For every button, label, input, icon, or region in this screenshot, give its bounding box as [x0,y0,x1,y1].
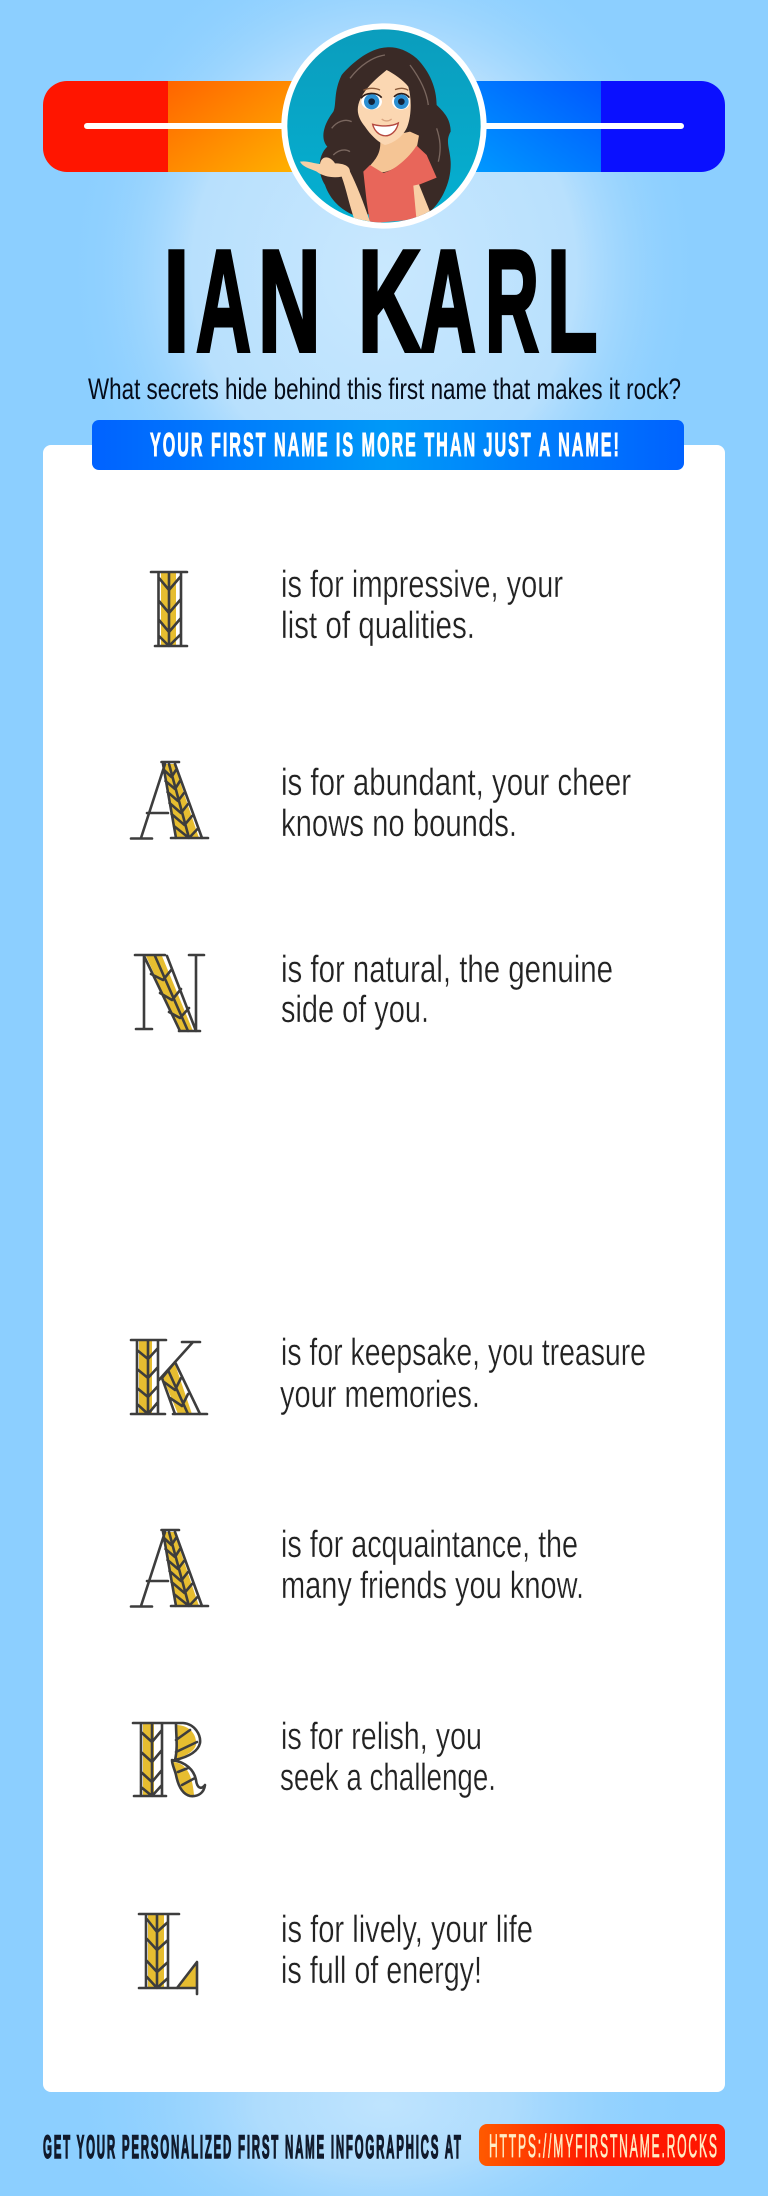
footer link button: HTTPS://MYFIRSTNAME.ROCKS [489,2129,717,2165]
icon: letter K [131,1340,207,1414]
text: K [280,1332,646,1416]
row: A second [131,1524,584,1607]
text: R: is for relish, you [281,1716,482,1758]
text: N [281,949,613,1031]
icon: letter A [131,762,208,838]
avatar: cartoon woman in circle [281,23,487,229]
row: K [131,1332,646,1416]
text: A second: is for acquaintance, the [281,1524,578,1566]
row: L [139,1909,533,1994]
icon: letter R [133,1723,205,1796]
title: A [420,220,476,382]
banner: YOUR FIRST NAME IS MORE THAN JUST A NAME! [150,426,619,464]
text: N: is for natural, the genuine [281,949,613,991]
header ribbon [43,81,725,172]
row: N [135,949,613,1031]
row: R [133,1716,496,1799]
title: A [196,220,251,382]
text: A second: many friends you know. [281,1565,584,1607]
text: I: is for impressive, your [281,564,563,606]
row: I [151,564,563,647]
text: A [281,762,631,845]
text: K: is for keepsake, you treasure [281,1332,646,1374]
title: K [358,220,421,382]
icon: letter L [139,1914,197,1994]
title: N [258,220,321,382]
text: L: is full of energy! [281,1950,482,1992]
text: K: your memories. [280,1374,480,1416]
text: N: side of you. [281,989,429,1031]
text: A second [281,1524,584,1607]
text: I [281,564,563,647]
text: L [281,1909,533,1992]
title: I [163,220,189,382]
icon: letter N [135,955,204,1031]
text: A: knows no bounds. [281,803,517,845]
row: A [131,762,631,845]
icon: letter A [131,1530,208,1606]
text: R: seek a challenge. [280,1757,496,1799]
icon: letter I [151,572,187,646]
title: R [485,220,539,382]
title: L [547,220,598,382]
footer call to action: GET YOUR PERSONALIZED FIRST NAME INFOGRAPHICS AT [43,2130,461,2166]
text: I: list of qualities. [281,605,475,647]
title [163,220,598,382]
panel: letters [43,445,725,2092]
text: L: is for lively, your life [281,1909,533,1951]
banner [92,420,684,470]
text: R [280,1716,496,1799]
text: A: is for abundant, your cheer [281,762,631,804]
